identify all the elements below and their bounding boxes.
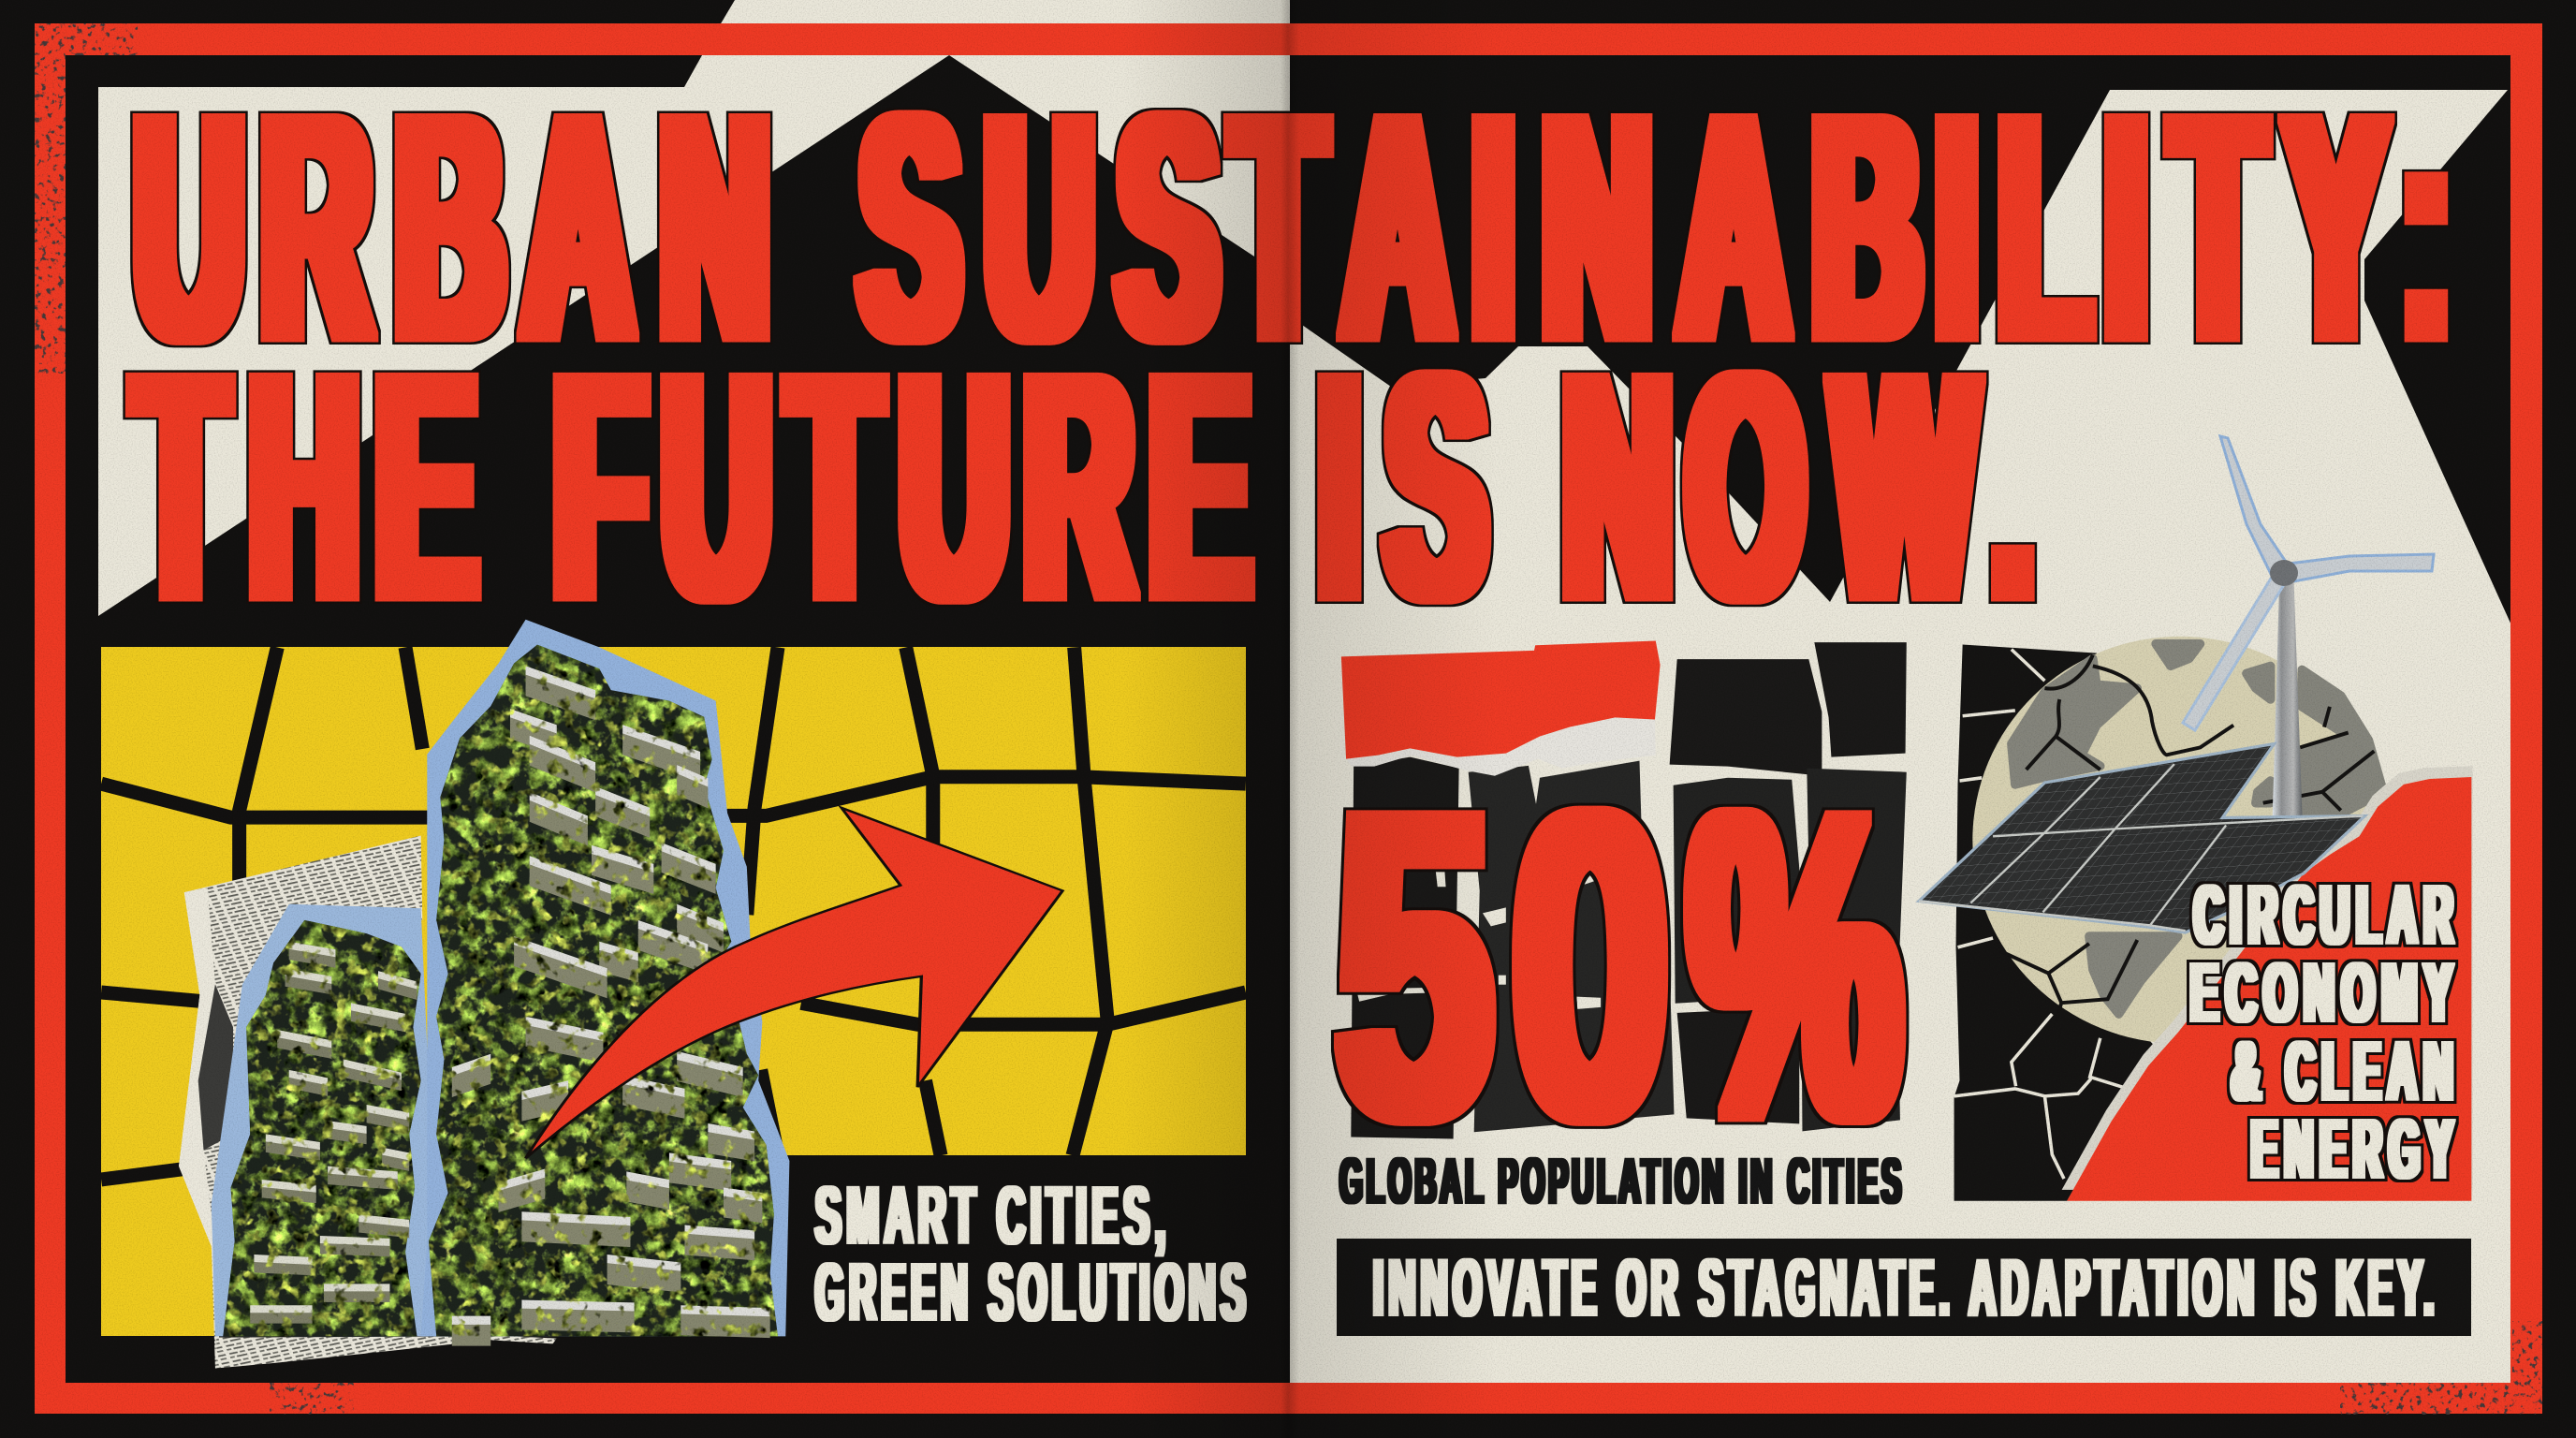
cream cracks in black paper [1954,650,2137,1179]
caption: smart cities: SMART CITIES, [815,1170,1171,1261]
panel: cream wedge beside spine [949,55,1290,280]
torn white underside [1346,717,1656,776]
torn paper white edge [2062,766,2473,1190]
collage: torn newspaper clipping [179,836,557,1369]
title: URBAN SUSTAINABILITY: [135,50,2452,405]
black cracked paper [1954,644,2178,1201]
text: GLOBAL POPULATION IN CITIES [1339,1145,1905,1217]
caption: smart cities [815,1170,1251,1338]
caption: circular economy and clean energy [2190,869,2460,1196]
panel: yellow city map [101,647,1246,1336]
collage: cracked globe with solar panel and wind turbine [1919,436,2473,1201]
stat: 50% [1337,725,1901,1207]
stat: 50%: % [1689,725,1901,1206]
torn red strip [1341,640,1661,759]
panel: right page cream [1290,90,2512,1384]
arrow: red curved arrow [526,808,1062,1158]
text: GREEN SOLUTIONS [815,1247,1251,1338]
image: small green tower [201,889,440,1339]
solar panel frame lines [1919,764,2363,931]
torn red paper [2067,777,2471,1201]
centre spine shadow [1123,0,1498,1438]
grey land masses [2012,644,2383,1014]
panel: left page cream diagonal shape [98,55,949,616]
collage: torn black and red paper behind 50% [1341,640,1907,1138]
street grid lines [101,647,1246,1180]
title [135,50,2452,665]
globe cracks [2000,655,2374,1021]
globe [1972,637,2387,1044]
panel: cream top strip above frame [702,0,1290,55]
torn dark photo scrap [198,984,233,1151]
title: THE FUTURE IS NOW. [135,309,2034,665]
turbine tower [2273,570,2303,821]
cream tears between pieces [1357,859,1601,1009]
torn paper white edge [179,888,217,1369]
wind turbine blades [2220,436,2434,582]
image: large green tower [421,620,796,1346]
solar panel [1919,743,2364,932]
turbine hub [2270,560,2298,586]
turbine blade low [2183,569,2288,730]
black paper pieces [1351,642,1907,1138]
stat: 50%: 50 [1337,726,1669,1207]
